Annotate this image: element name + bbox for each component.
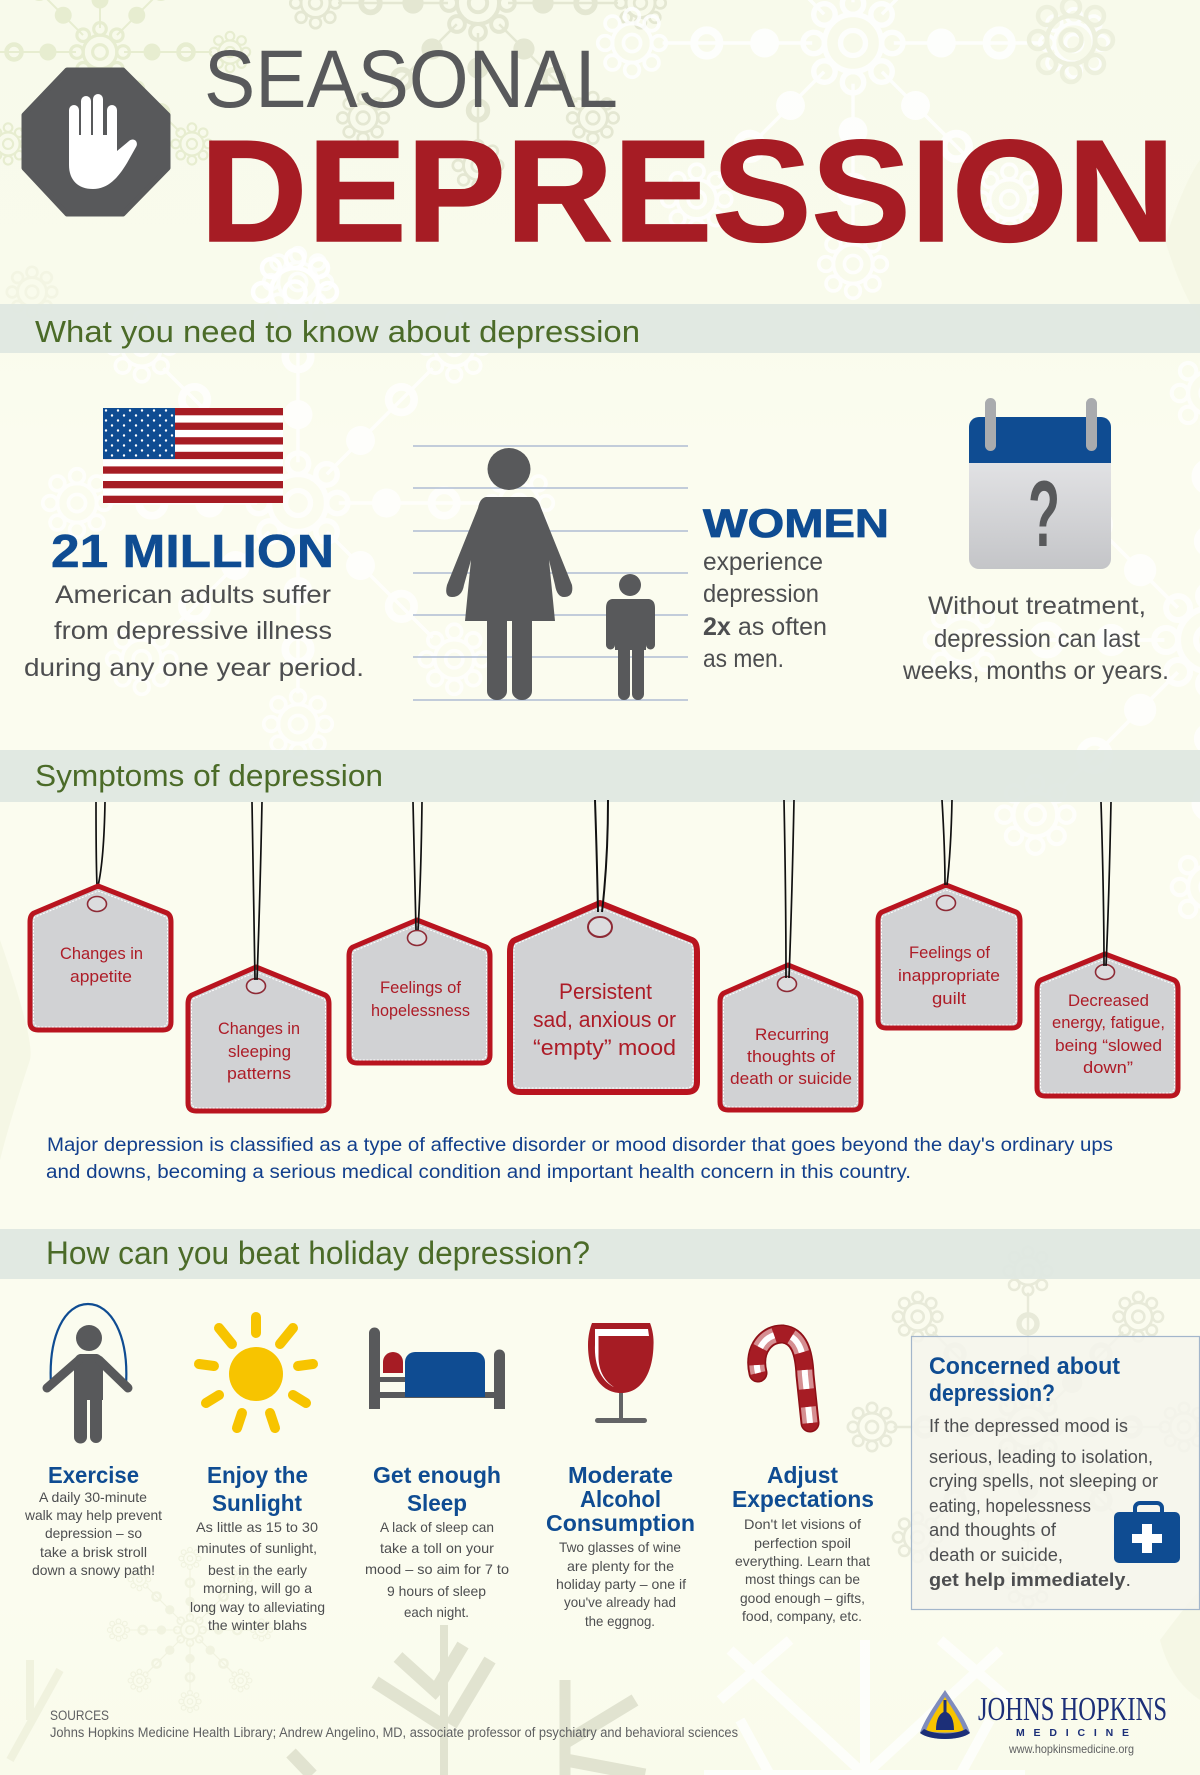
text: sleep advice: A lack of sleep can	[380, 1519, 494, 1535]
tag: feelings of hopelessness	[349, 802, 490, 1063]
text: exercise advice: depression – so	[45, 1525, 142, 1541]
text: sleep advice: take a toll on your	[380, 1540, 494, 1556]
tag: feelings of hopelessness: Feelings of	[380, 978, 461, 997]
callout text: death or suicide,	[929, 1544, 1063, 1565]
text: sunlight advice: As little as 15 to 30	[196, 1519, 318, 1535]
stat: 21 million	[24, 525, 364, 682]
icon: american flag	[103, 408, 283, 503]
callout heading: depression?	[929, 1380, 1055, 1407]
tag: changes in appetite: Changes in	[60, 944, 143, 963]
text: alcohol advice: you've already had	[564, 1594, 676, 1610]
text: expectations advice: Don't let visions of	[744, 1516, 861, 1532]
stat description: from depressive illness	[54, 617, 332, 645]
callout heading	[929, 1353, 1120, 1407]
heading: moderate alcohol consumption	[546, 1462, 695, 1536]
text: alcohol advice: Two glasses of wine	[559, 1539, 681, 1555]
tip: expectations	[732, 1334, 874, 1624]
heading: adjust expectations	[732, 1462, 874, 1512]
stat description: as men.	[703, 645, 784, 673]
text: sunlight advice: minutes of sunlight,	[197, 1540, 317, 1556]
callout text: eating, hopelessness	[929, 1495, 1091, 1516]
tag: feelings of inappropriate guilt	[878, 800, 1020, 1028]
callout text: serious, leading to isolation,	[929, 1446, 1153, 1467]
sources: SOURCES	[50, 1708, 109, 1723]
text: major depression description	[46, 1135, 1113, 1183]
tag: persistent sad, anxious or empty mood: “empty” mood	[533, 1035, 676, 1060]
logo: johns hopkins medicine	[920, 1690, 1167, 1756]
heading: moderate alcohol consumption: Moderate	[568, 1462, 673, 1488]
text: without treatment	[902, 592, 1169, 685]
tag: feelings of inappropriate guilt: guilt	[932, 989, 966, 1008]
text: exercise advice: take a brisk stroll	[40, 1544, 147, 1560]
text: exercise advice: walk may help prevent	[24, 1507, 162, 1523]
icon: candy cane	[757, 1334, 810, 1423]
text: sleep advice: each night.	[404, 1604, 469, 1620]
logo subtitle: MEDICINE	[1016, 1727, 1129, 1739]
text: without treatment: weeks, months or years.	[902, 657, 1169, 685]
icon: calendar: ?	[1028, 461, 1060, 566]
heading: moderate alcohol consumption: Alcohol	[580, 1486, 661, 1512]
tag: feelings of inappropriate guilt: Feelings of	[909, 943, 990, 962]
callout text: If the depressed mood is	[929, 1415, 1128, 1436]
website: www.hopkinsmedicine.org	[1008, 1742, 1134, 1756]
tag: decreased energy: Decreased	[1068, 991, 1149, 1010]
icon: stop sign with hand	[24, 70, 168, 214]
text: sleep advice: 9 hours of sleep	[387, 1583, 486, 1599]
tag: feelings of hopelessness: hopelessness	[371, 1001, 470, 1020]
callout text: get help immediately .	[929, 1569, 1131, 1590]
heading: get enough sleep: Get enough	[373, 1462, 501, 1488]
text: expectations advice: perfection spoil	[754, 1535, 851, 1551]
text: expectations advice: food, company, etc.	[742, 1608, 862, 1624]
tag: changes in sleeping patterns: sleeping	[228, 1042, 291, 1061]
tag: decreased energy: being “slowed	[1055, 1036, 1162, 1055]
title line: depression: DEPRESSION	[200, 110, 1175, 272]
stat heading: WOMEN	[703, 502, 889, 546]
tip: sleep	[365, 1328, 509, 1620]
heading: adjust expectations: Adjust	[767, 1462, 838, 1488]
text: sleep advice: mood – so aim for 7 to	[365, 1561, 509, 1577]
text: without treatment: Without treatment,	[928, 592, 1146, 620]
section heading: how can you beat holiday depression: How can you beat holiday depression?	[46, 1235, 590, 1271]
tag: recurring thoughts: thoughts of	[747, 1047, 835, 1066]
heading: get enough sleep	[373, 1462, 501, 1516]
stat description	[703, 548, 827, 673]
tag: recurring thoughts: Recurring	[755, 1025, 829, 1044]
text: sleep advice	[365, 1519, 509, 1620]
panel: concerned about depression	[912, 1336, 1200, 1610]
text: sunlight advice	[190, 1519, 325, 1633]
icon: first aid kit	[1114, 1503, 1180, 1563]
tip: exercise	[24, 1304, 162, 1578]
icon: sun	[199, 1317, 313, 1428]
stat description: experience	[703, 548, 823, 576]
stat description: American adults suffer	[55, 581, 331, 609]
text: sunlight advice: best in the early	[208, 1562, 307, 1578]
tag: changes in appetite: appetite	[70, 967, 132, 986]
logo shield	[920, 1690, 970, 1739]
section heading: what you need to know	[0, 304, 1200, 353]
heading: enjoy the sunlight: Sunlight	[212, 1490, 302, 1516]
tag: decreased energy: energy, fatigue,	[1052, 1013, 1165, 1032]
tip: sunlight	[190, 1317, 325, 1633]
tag: persistent sad, anxious or empty mood: Persistent	[559, 979, 652, 1004]
icon: calendar	[969, 398, 1111, 569]
section heading: symptoms	[0, 750, 1200, 802]
panel: symptom tags	[30, 800, 1178, 1111]
heading: enjoy the sunlight	[207, 1462, 308, 1516]
stat description: depression	[703, 580, 819, 608]
tag: changes in sleeping patterns	[188, 802, 329, 1111]
stat description: 2x as often	[703, 613, 827, 641]
heading: moderate alcohol consumption: Consumption	[546, 1510, 695, 1536]
icon: small figure	[606, 574, 655, 700]
text: exercise advice	[24, 1489, 162, 1578]
icon: person with jump rope	[47, 1304, 128, 1444]
section heading: what you need to know: What you need to know about depression	[35, 314, 640, 349]
tag: changes in appetite	[30, 802, 171, 1030]
tag: recurring thoughts: death or suicide	[730, 1069, 852, 1088]
tag: changes in sleeping patterns: patterns	[227, 1064, 291, 1083]
tag: persistent sad, anxious or empty mood	[510, 800, 697, 1092]
text: exercise advice: down a snowy path!	[32, 1562, 155, 1578]
chart: woman and man height comparison	[413, 446, 688, 700]
text: sunlight advice: long way to alleviating	[190, 1599, 325, 1615]
tag: feelings of inappropriate guilt: inappropriate	[898, 966, 1000, 985]
tag: persistent sad, anxious or empty mood: sad, anxious or	[533, 1007, 676, 1032]
title line: seasonal: SEASONAL	[204, 34, 618, 125]
stat: women	[703, 502, 889, 673]
text: major depression description: and downs, becoming a serious medical condition and important health concern in this country.	[46, 1162, 911, 1183]
icon: tall figure	[446, 448, 572, 700]
text: sunlight advice: the winter blahs	[208, 1617, 307, 1633]
tip: alcohol	[546, 1323, 695, 1629]
text: alcohol advice: holiday party – one if	[556, 1576, 686, 1592]
sources	[50, 1708, 738, 1740]
tag: decreased energy	[1037, 802, 1178, 1096]
text: sunlight advice: morning, will go a	[203, 1580, 312, 1596]
callout text: crying spells, not sleeping or	[929, 1470, 1158, 1491]
stat description: during any one year period.	[24, 654, 364, 682]
callout text: and thoughts of	[929, 1519, 1057, 1540]
heading: enjoy the sunlight: Enjoy the	[207, 1462, 308, 1488]
text: exercise advice: A daily 30-minute	[39, 1489, 147, 1505]
icon: wine glass	[588, 1323, 654, 1423]
heading: adjust expectations: Expectations	[732, 1486, 874, 1512]
text: expectations advice: good enough – gifts,	[740, 1590, 865, 1606]
text: expectations advice: everything. Learn that	[735, 1553, 870, 1569]
callout text	[929, 1415, 1158, 1590]
tag: decreased energy: down”	[1083, 1058, 1133, 1077]
title	[200, 34, 1175, 272]
heading: exercise: Exercise	[48, 1462, 139, 1488]
text: alcohol advice	[556, 1539, 686, 1629]
text: without treatment: depression can last	[934, 625, 1140, 653]
section heading: how can you beat holiday depression	[0, 1229, 1200, 1279]
text: alcohol advice: are plenty for the	[567, 1558, 674, 1574]
stat description	[24, 581, 364, 682]
text: major depression description: Major depression is classified as a type of affective disorder or mood disorder that goes beyond the day's ordinary ups	[47, 1135, 1113, 1156]
callout heading: Concerned about	[929, 1353, 1120, 1380]
tag: changes in sleeping patterns: Changes in	[218, 1019, 300, 1038]
text: expectations advice: most things can be	[745, 1571, 860, 1587]
text: alcohol advice: the eggnog.	[585, 1613, 655, 1629]
tag: recurring thoughts	[720, 800, 861, 1110]
stat number: 21 MILLION	[51, 525, 334, 577]
section heading: symptoms: Symptoms of depression	[35, 758, 383, 793]
text: expectations advice	[735, 1516, 870, 1624]
icon: bed	[369, 1328, 505, 1409]
heading: get enough sleep: Sleep	[407, 1490, 467, 1516]
sources: Johns Hopkins Medicine Health Library; Andrew Angelino, MD, associate professor of psychiatry and behavioral sciences	[50, 1725, 738, 1740]
